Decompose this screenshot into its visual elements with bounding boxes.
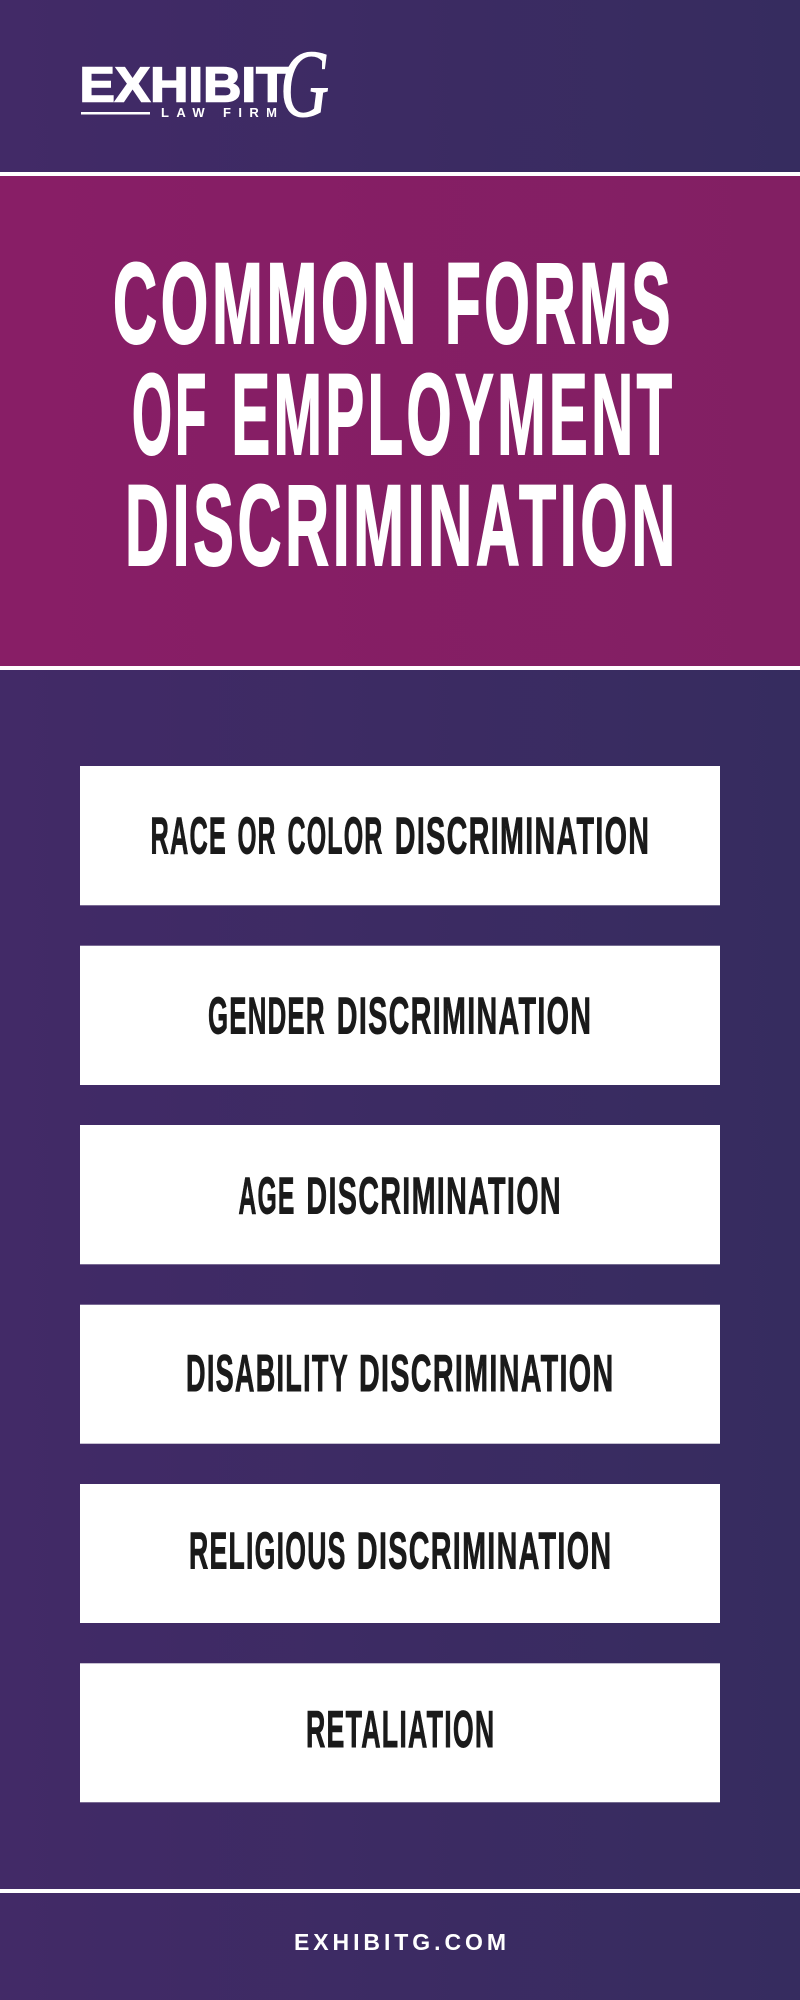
logo: Exhibit G Law Firm: LAW FIRM: [161, 105, 277, 120]
card: gender: [80, 946, 720, 1085]
title panel bottom line: [0, 666, 800, 670]
footer website: EXHIBITG.COM: [294, 1929, 506, 1955]
logo: Exhibit G Law Firm: EXHIBIT: [80, 58, 289, 112]
footer divider line: [0, 1889, 800, 1893]
card: disability: [80, 1305, 720, 1444]
card: race or color: OR: [238, 808, 276, 866]
card: disability: DISABILITY: [186, 1345, 349, 1403]
card: religious: [80, 1484, 720, 1623]
card: religious: RELIGIOUS: [189, 1522, 347, 1580]
card: gender: GENDER: [208, 988, 326, 1046]
title text: OF: [132, 351, 210, 479]
card: race or color: RACE: [150, 808, 227, 866]
card: retaliation: [80, 1663, 720, 1802]
card: age: AGE: [238, 1168, 296, 1226]
title panel: [0, 176, 800, 666]
card: gender: DISCRIMINATION: [337, 988, 592, 1046]
card: age: [80, 1125, 720, 1264]
card: retaliation: RETALIATION: [306, 1701, 496, 1759]
card: race or color: [80, 766, 720, 905]
title text: [113, 240, 679, 590]
header divider line: [0, 172, 800, 176]
title text: COMMON: [113, 240, 420, 368]
logo: Exhibit G Law Firm: [80, 31, 329, 137]
card: race or color: COLOR: [288, 808, 384, 866]
logo: Exhibit G Law Firm: G: [280, 31, 329, 137]
card: age: DISCRIMINATION: [306, 1168, 562, 1226]
